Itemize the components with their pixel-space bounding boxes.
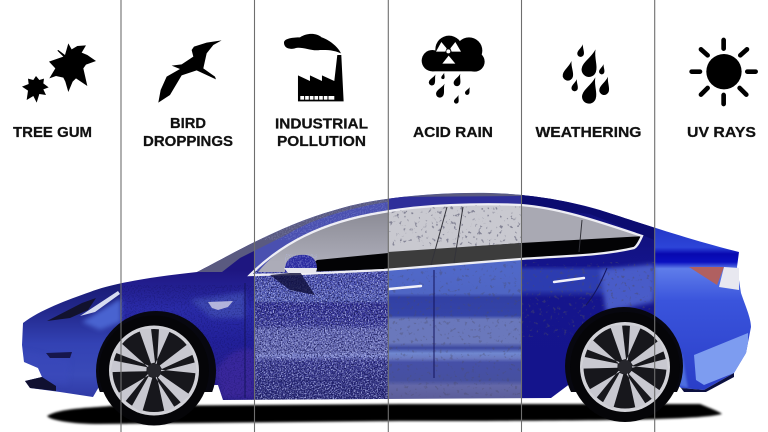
tail light [681, 267, 739, 392]
icon: sun [692, 40, 756, 104]
label: ACID RAIN [413, 125, 493, 141]
column: acid rain [413, 36, 493, 141]
ground shadow [47, 404, 722, 424]
front bumper details [25, 301, 233, 391]
icon: radioactive cloud and rain [422, 36, 485, 104]
column: weathering [536, 43, 642, 141]
front wheel [96, 311, 216, 431]
column: tree gum [13, 43, 96, 141]
icon: maple leaves [22, 43, 96, 103]
label: WEATHERING [536, 125, 642, 141]
divider lines [121, 0, 655, 432]
headlight [47, 291, 120, 321]
door seams and handles [245, 268, 607, 398]
side mirror [270, 254, 317, 295]
icon: rain drops [562, 43, 613, 105]
label: BIRD [170, 116, 206, 132]
label: UV RAYS [687, 125, 756, 141]
label [143, 116, 233, 150]
label: INDUSTRIAL [275, 116, 368, 132]
car illustration [0, 190, 754, 431]
column: bird droppings [143, 40, 233, 150]
label: POLLUTION [277, 134, 366, 150]
label: DROPPINGS [143, 134, 233, 150]
label: TREE GUM [13, 125, 92, 141]
column: industrial pollution [275, 34, 368, 150]
icon: factory with smoke [284, 34, 344, 101]
icon: bird [158, 40, 222, 103]
column: uv rays [687, 40, 756, 141]
rear wheel [565, 307, 683, 425]
car body paint bands [0, 190, 754, 405]
windshield and roof strip [197, 193, 521, 272]
side windows [250, 200, 646, 276]
label [275, 116, 368, 150]
